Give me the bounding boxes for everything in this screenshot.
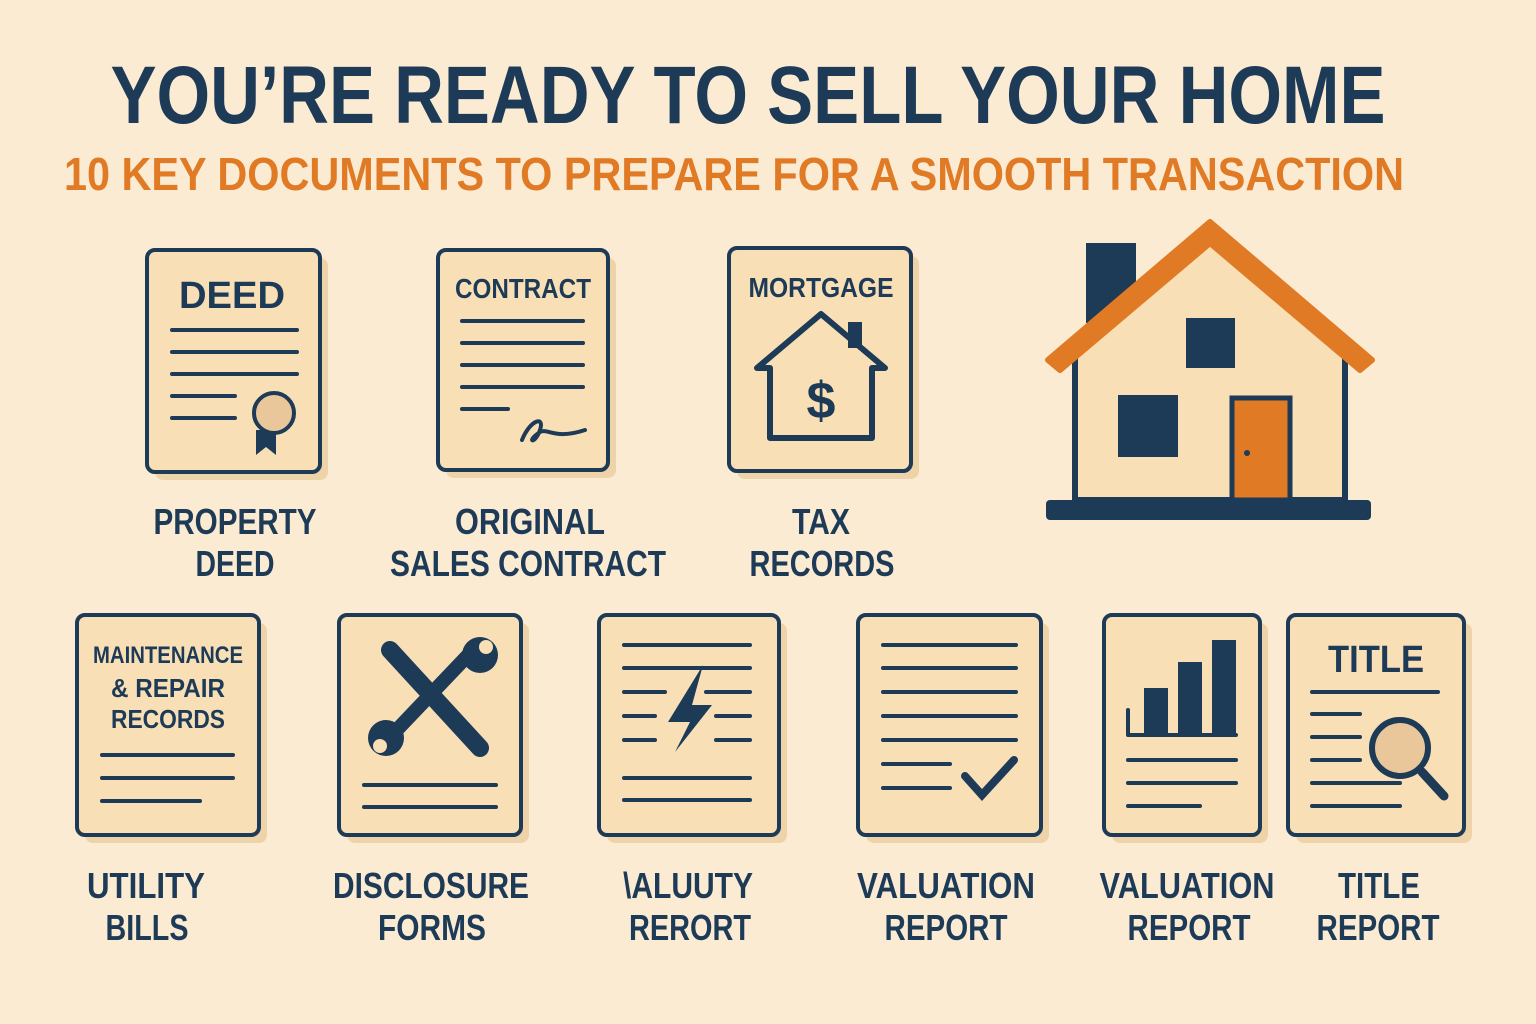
card: contract xyxy=(438,250,616,478)
label: property deed: DEED xyxy=(196,543,274,584)
label: tax records: RECORDS xyxy=(750,543,894,584)
label: original sales contract: ORIGINAL xyxy=(455,501,605,542)
label: utility bills: BILLS xyxy=(106,907,188,948)
card: mortgage xyxy=(729,248,919,479)
icon: house xyxy=(1046,222,1372,520)
label: valuation report 2: VALUATION xyxy=(1100,865,1274,906)
card: mortgage: $ xyxy=(807,372,836,430)
card: maintenance xyxy=(77,615,267,843)
label: tax records: TAX xyxy=(792,501,850,542)
label: title report: REPORT xyxy=(1316,907,1440,948)
label: utility bills: UTILITY xyxy=(87,865,205,906)
card: mortgage: MORTGAGE xyxy=(748,272,894,303)
label: disclosure forms: DISCLOSURE xyxy=(333,865,529,906)
label: title report: TITLE xyxy=(1338,865,1420,906)
card: property deed xyxy=(147,250,328,480)
card: title xyxy=(1288,615,1472,843)
label: valuation report 1: REPORT xyxy=(884,907,1008,948)
card: property deed: DEED xyxy=(179,275,285,317)
card: maintenance: & REPAIR xyxy=(111,673,225,703)
card: chart xyxy=(1104,615,1268,843)
card: valuation checklist xyxy=(858,615,1049,843)
card: tools xyxy=(339,615,529,843)
card: title: TITLE xyxy=(1328,639,1424,681)
label: valuuty rerort: \ALUUTY xyxy=(623,865,753,906)
label: property deed: PROPERTY xyxy=(154,501,316,542)
card: energy xyxy=(599,615,787,843)
label: valuation report 2: REPORT xyxy=(1128,907,1251,948)
card: maintenance: MAINTENANCE xyxy=(93,642,243,669)
label: valuuty rerort: RERORT xyxy=(629,907,751,948)
card: maintenance: RECORDS xyxy=(111,704,225,734)
label: disclosure forms: FORMS xyxy=(378,907,486,948)
label: valuation report 1: VALUATION xyxy=(857,865,1035,906)
label: original sales contract: SALES CONTRACT xyxy=(390,543,666,584)
subtitle: 10 KEY DOCUMENTS TO PREPARE FOR A SMOOTH TRANSACTION xyxy=(64,148,1404,200)
card: contract: CONTRACT xyxy=(455,273,591,304)
